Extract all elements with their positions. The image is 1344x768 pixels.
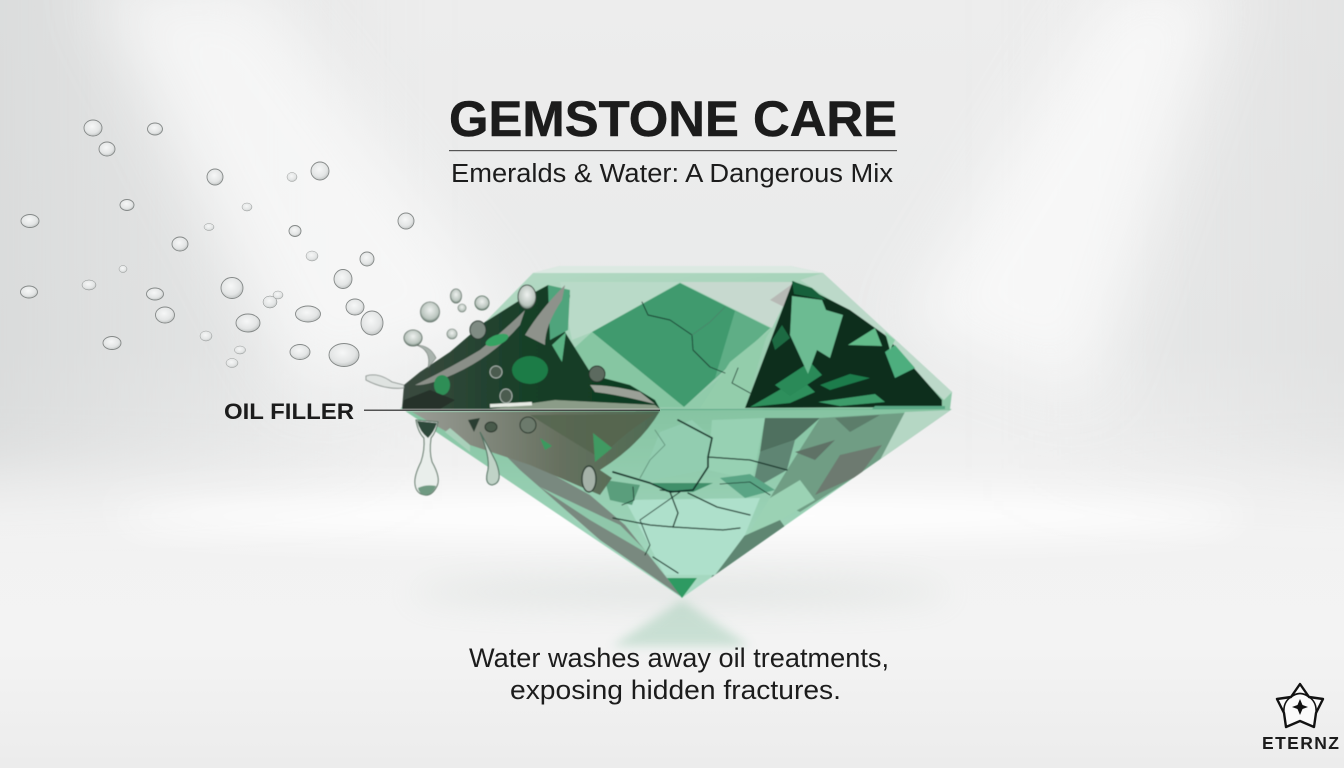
- title: GEMSTONE CARE: [449, 91, 897, 147]
- logo: Eternz: ETERNZ: [1262, 733, 1339, 753]
- oil film: upper left: [402, 285, 660, 409]
- hanging drip: center: [582, 466, 596, 492]
- hanging drip: left: [415, 420, 438, 495]
- dark right facets: [745, 281, 942, 408]
- emerald gem: [366, 266, 952, 598]
- center kite facet: [592, 283, 770, 407]
- caption: exposing hidden fractures.: [510, 675, 841, 705]
- water droplets scattering away: [20, 120, 414, 368]
- caption: Water washes away oil treatments,: [469, 643, 889, 673]
- title rule: [449, 150, 897, 151]
- hanging drip: right: [480, 432, 499, 485]
- pavilion: [405, 409, 952, 598]
- label: oil filler: OIL FILLER: [224, 399, 354, 424]
- icon: star flower: [1277, 684, 1323, 727]
- reflection of gem on floor: [612, 600, 750, 646]
- crown: [400, 266, 952, 414]
- splash droplets: [366, 285, 605, 433]
- subtitle: Emeralds & Water: A Dangerous Mix: [451, 160, 893, 188]
- oil film: lower left: [412, 411, 660, 495]
- girdle band: [660, 406, 945, 414]
- light spike facet: [790, 296, 843, 374]
- caption: [469, 643, 889, 705]
- logo: Eternz: [1262, 684, 1339, 753]
- leader line: [364, 410, 660, 411]
- fractures: [613, 302, 787, 573]
